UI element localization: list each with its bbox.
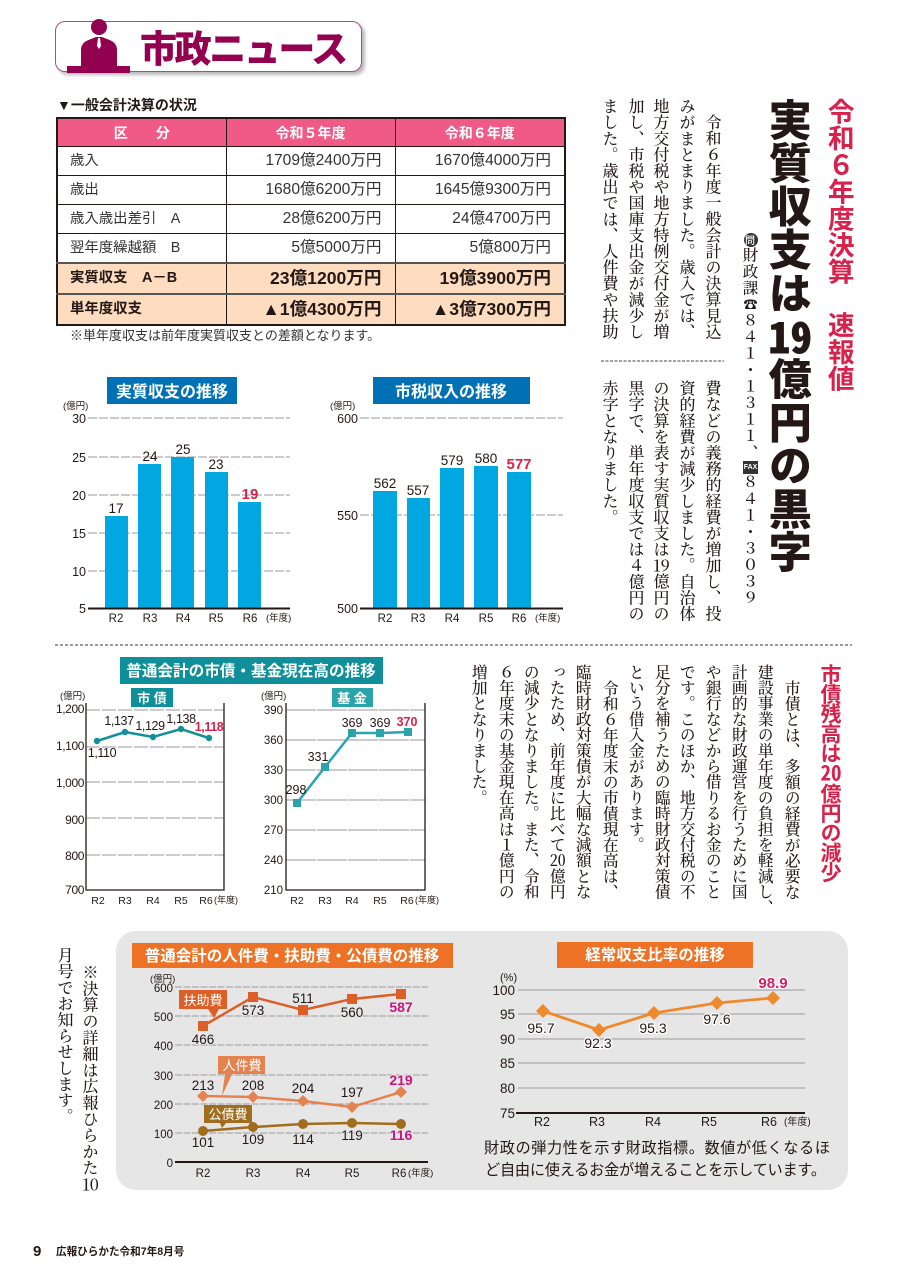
- line chart: 基金: R3: [318, 895, 332, 907]
- settlement table: 23億1200万円: [270, 268, 382, 288]
- settlement table: 1680億6200万円: [265, 181, 382, 198]
- series: 公債費: 116: [390, 1127, 413, 1143]
- chart label: 市 債: [137, 691, 167, 706]
- line chart: 市債: R3: [118, 895, 132, 907]
- line chart: 経常収支比率: 75: [500, 1106, 515, 1121]
- line chart: 人件費・扶助費・公債費: R6: [392, 1168, 406, 1180]
- chart label: [332, 688, 373, 707]
- chart caption: [484, 1140, 830, 1179]
- series: 人件費: 208: [242, 1078, 264, 1093]
- note: details in October issue: [54, 947, 102, 1192]
- article body: municipal debt: ったため、前年度に比べて 20 億円: [547, 664, 569, 900]
- line chart: 基金: (億円): [261, 690, 286, 702]
- line chart: 経常収支比率: R4: [645, 1115, 661, 1129]
- section divider: [55, 644, 852, 646]
- article body: municipal debt: 増加となりました。: [469, 664, 491, 805]
- red heading: municipal debt: 市債残高は 20 億円の減少: [816, 664, 846, 881]
- settlement table: 令和５年度: [276, 124, 346, 140]
- series: 公債費: 114: [292, 1132, 314, 1147]
- settlement table: 28億6200万円: [283, 210, 382, 227]
- line chart: 基金: 390: [264, 705, 283, 717]
- vertical column rule: [601, 360, 724, 362]
- line chart: 市債: 1,000: [56, 776, 85, 790]
- series: 扶助費: 560: [341, 1005, 363, 1020]
- line chart: 基金: 370: [397, 715, 417, 729]
- bar chart: 実質収支の推移: 10: [72, 565, 86, 579]
- series: 人件費: 197: [341, 1085, 363, 1100]
- main headline: 実質収支は 19 億円の黒字: [759, 98, 821, 573]
- bar chart: 実質収支の推移: R6: [243, 613, 257, 625]
- line chart: 基金: R2: [290, 895, 304, 907]
- bar chart: 実質収支の推移: R4: [176, 613, 191, 625]
- article body: municipal debt: です。このほか、地方交付税の不: [677, 664, 699, 900]
- note: details in October issue: ※決算の詳細は広報ひらかた 10: [79, 964, 102, 1192]
- line chart: 市債: R5: [174, 895, 188, 907]
- line chart: 基金: 300: [264, 795, 283, 807]
- column text lower part: 黒字で、単年度収支では４億円の: [625, 380, 648, 622]
- bar chart: 実質収支の推移: 20: [72, 489, 86, 503]
- chart caption: 財政の弾力性を示す財政指標。数値が低くなるほ: [484, 1140, 830, 1157]
- series: 公債費: 119: [341, 1128, 363, 1143]
- bar chart: 市税収入の推移: R2: [378, 613, 392, 625]
- bar chart: 市税収入の推移: 562: [374, 476, 396, 491]
- column text upper part: ました。歳出では、人件費や扶助: [599, 98, 622, 340]
- contact line: 問: [745, 232, 756, 247]
- series: 人件費: 人件費: [222, 1058, 262, 1073]
- bar chart: 実質収支の推移: 5: [79, 602, 86, 616]
- contact line: 財政課 ８４１・１３１１、 ８４１・３０３９: [740, 247, 762, 606]
- line chart: 人件費・扶助費・公債費: 300: [154, 1071, 173, 1083]
- line chart: 経常収支比率: 90: [500, 1032, 515, 1047]
- column text lower part: 赤字となりました。: [599, 380, 622, 525]
- line chart: 経常収支比率: 95: [500, 1007, 515, 1022]
- line chart: 市債: 1,137: [104, 714, 134, 728]
- line chart: 人件費・扶助費・公債費: 100: [154, 1129, 173, 1141]
- settlement table: [56, 117, 566, 326]
- column text upper part: 令和６年度一般会計の決算見込: [702, 114, 725, 339]
- bar chart: 実質収支の推移: 25: [72, 451, 86, 465]
- line chart: 基金: 330: [264, 765, 283, 777]
- chart caption: ど自由に使えるお金が増えることを示しています。: [485, 1162, 826, 1179]
- bar chart: 市税収入の推移: R4: [445, 613, 460, 625]
- line chart: 人件費・扶助費・公債費: 400: [154, 1041, 173, 1053]
- chart title: [373, 377, 530, 404]
- chart title: 普通会計の人件費・扶助費・公債費の推移: [145, 946, 440, 965]
- series: 公債費: 101: [192, 1135, 214, 1150]
- settlement table: 24億4700万円: [452, 210, 551, 227]
- bar chart: 市税収入の推移: 580: [475, 451, 497, 466]
- column text upper part: [599, 98, 725, 340]
- settlement table: 19億3900万円: [440, 268, 551, 288]
- line chart: 人件費・扶助費・公債費: 600: [154, 983, 173, 995]
- bar chart: 市税収入の推移: 500: [337, 602, 358, 616]
- page number: 9: [33, 1243, 41, 1260]
- chart label: 基 金: [337, 691, 367, 706]
- line chart: 市債: 900: [65, 813, 85, 827]
- article body: FY settlement: [599, 98, 725, 622]
- bar chart: 市税収入の推移: R3: [411, 613, 425, 625]
- line chart: 人件費・扶助費・公債費: R3: [246, 1168, 260, 1180]
- line chart: 市債: (年度): [214, 894, 238, 905]
- series: 人件費: [192, 1056, 413, 1113]
- line chart: 経常収支比率: 80: [500, 1081, 515, 1096]
- banner frame: [55, 21, 362, 72]
- series: 扶助費: [179, 989, 413, 1047]
- line chart: 経常収支比率: R5: [701, 1115, 717, 1129]
- series: 人件費: 204: [292, 1081, 315, 1096]
- line chart: 経常収支比率: R6: [761, 1115, 777, 1129]
- line chart: 市債: 1,200: [56, 702, 85, 716]
- column text upper part: 地方交付税や地方特例交付金が増: [650, 98, 673, 340]
- line chart: 経常収支比率: (%): [500, 972, 517, 984]
- table heading: ▼一般会計決算の状況: [57, 97, 197, 113]
- series: 公債費: 公債費: [208, 1107, 248, 1122]
- contact line: ☎: [740, 297, 760, 312]
- line chart: 経常収支比率: 92.3: [584, 1035, 612, 1051]
- column text lower part: 費などの義務的経費が増加し、投: [702, 380, 725, 622]
- chart title: 経常収支比率の推移: [585, 946, 725, 964]
- line chart: 人件費・扶助費・公債費: (億円): [150, 973, 175, 985]
- line chart: 市債: 1,129: [135, 719, 165, 733]
- line chart: 基金: 360: [264, 735, 283, 747]
- red subtitle: 令和６年度決算 速報値: [822, 98, 861, 392]
- settlement table: 5億5000万円: [291, 239, 382, 256]
- chart label: [131, 688, 173, 707]
- settlement table: 実質収支 A－B: [70, 270, 177, 286]
- bar chart: 市税収入の推移: R5: [479, 613, 493, 625]
- settlement table: 1645億9300万円: [435, 181, 551, 198]
- line chart: 経常収支比率: 98.9: [758, 975, 788, 992]
- line chart: 基金: 331: [308, 750, 328, 764]
- bar chart: 市税収入の推移: R6: [512, 613, 526, 625]
- line chart: 市債: [56, 688, 238, 907]
- line chart: 基金: [261, 688, 439, 907]
- line chart: 基金: R4: [345, 895, 359, 907]
- bar chart: 市税収入の推移: (億円): [330, 400, 355, 412]
- bar chart: 市税収入の推移: [330, 377, 563, 625]
- bar chart: 実質収支の推移: R2: [109, 613, 123, 625]
- line chart: 市債: 700: [65, 883, 85, 897]
- series: 公債費: 109: [242, 1132, 264, 1147]
- bar chart: 実質収支の推移: R3: [143, 613, 157, 625]
- bar chart: 実質収支の推移: 23: [208, 457, 224, 472]
- line chart: 経常収支比率: 95.7: [527, 1020, 555, 1036]
- bar chart: 実質収支の推移: 30: [72, 412, 86, 426]
- line chart: 経常収支比率: 85: [500, 1056, 515, 1071]
- line chart: 経常収支比率: 95.3: [639, 1020, 667, 1036]
- article body: municipal debt: や銀行などから借りるお金のこと: [703, 664, 725, 900]
- line chart: 人件費・扶助費・公債費: R2: [196, 1168, 210, 1180]
- article body: municipal debt: の減少となりました。また、令和: [521, 664, 543, 900]
- settlement table: 区 分: [114, 124, 170, 140]
- line chart: 人件費・扶助費・公債費: [132, 943, 453, 1180]
- series: 人件費: 219: [389, 1072, 413, 1088]
- table footnote: ※単年度収支は前年度実質収支との差額となります。: [70, 328, 380, 343]
- bar chart: 市税収入の推移: 550: [337, 509, 358, 523]
- line chart: 経常収支比率: R2: [534, 1115, 550, 1129]
- settlement table: 歳入: [70, 153, 99, 169]
- article body: municipal debt: 計画的な財政運営を行うために国: [729, 664, 751, 900]
- line chart: 基金: R5: [373, 895, 387, 907]
- contact line: FAX: [744, 464, 757, 471]
- column text lower part: [599, 380, 725, 622]
- icon: person at podium: [67, 19, 130, 73]
- line chart: 市債: 1,100: [56, 739, 85, 753]
- line chart: 人件費・扶助費・公債費: 500: [154, 1012, 173, 1024]
- settlement table: 5億800万円: [470, 239, 551, 256]
- bar chart: 市税収入の推移: 579: [441, 453, 463, 468]
- settlement table: 歳出: [70, 182, 99, 198]
- series: 扶助費: 扶助費: [183, 993, 223, 1008]
- bar chart: 実質収支の推移: 25: [175, 442, 191, 457]
- series: 扶助費: 573: [242, 1003, 264, 1018]
- line chart: 基金: 210: [264, 885, 283, 897]
- article body: municipal debt: 足分を補うための臨時財政対策債: [652, 664, 674, 900]
- settlement table: ▲3億7300万円: [432, 299, 551, 319]
- chart title: 市税収入の推移: [395, 382, 507, 401]
- bar chart: 実質収支の推移: 15: [72, 527, 86, 541]
- column text upper part: 加し、市税や国庫支出金が減少し: [625, 98, 648, 340]
- bar chart: 実質収支の推移: (年度): [266, 612, 291, 624]
- chart title: [132, 943, 453, 968]
- chart title: [107, 377, 237, 404]
- line chart: 市債: (億円): [60, 690, 85, 702]
- panel: gray background: [116, 931, 848, 1190]
- article body: municipal debt: 令和６年度末の市債現在高は、: [600, 680, 622, 900]
- line chart: 市債: 800: [65, 849, 85, 863]
- settlement table: ▲1億4300万円: [262, 299, 382, 319]
- chart section title: 市債・基金: 普通会計の市債・基金現在高の推移: [126, 661, 376, 680]
- article body: municipal debt: [469, 664, 804, 915]
- line chart: 市債: 1,118: [195, 720, 224, 734]
- article body: municipal debt: という借入金があります。: [626, 664, 648, 852]
- footer publication name: 広報ひらかた令和7年8月号: [56, 1245, 185, 1258]
- line chart: 基金: 369: [342, 716, 362, 730]
- article body: municipal debt: 市債とは、多額の経費が必要な: [782, 680, 804, 900]
- chart section title: 市債・基金: [120, 657, 383, 684]
- line chart: 市債: 1,110: [88, 746, 117, 760]
- settlement table: 1670億4000万円: [435, 152, 551, 169]
- bar chart: 実質収支の推移: 19: [242, 486, 258, 503]
- series: 扶助費: 466: [192, 1032, 214, 1047]
- line chart: 市債: R4: [146, 895, 160, 907]
- bar chart: 実質収支の推移: 17: [108, 501, 124, 516]
- banner title: 市政ニュース: [140, 19, 346, 73]
- line chart: 経常収支比率: [484, 942, 830, 1179]
- series: 人件費: 213: [192, 1078, 214, 1093]
- series: 公債費: [192, 1105, 413, 1150]
- settlement table: 翌年度繰越額 B: [70, 240, 180, 256]
- bar chart: 市税収入の推移: (年度): [535, 612, 560, 624]
- column text lower part: 資的経費が減少しました。自治体: [676, 380, 699, 622]
- settlement table: 単年度収支: [70, 301, 142, 317]
- article body: municipal debt: 臨時財政対策債が大幅な減額とな: [573, 664, 595, 900]
- line chart: 基金: R6: [400, 895, 414, 907]
- line chart: 基金: (年度): [415, 894, 439, 905]
- line chart: 経常収支比率: 100: [492, 983, 515, 998]
- settlement table: 令和６年度: [445, 124, 515, 140]
- line chart: 人件費・扶助費・公債費: R5: [345, 1168, 359, 1180]
- line chart: 市債: R2: [91, 895, 105, 907]
- line chart: 基金: 270: [264, 825, 283, 837]
- line chart: 人件費・扶助費・公債費: 0: [167, 1158, 173, 1170]
- bar chart: 市税収入の推移: 600: [337, 412, 358, 426]
- line chart: 人件費・扶助費・公債費: 200: [154, 1100, 173, 1112]
- note: details in October issue: 月号でお知らせします。: [54, 947, 77, 1124]
- line chart: 市債: 1,138: [166, 712, 196, 726]
- line chart: 基金: 240: [264, 855, 283, 867]
- article body: municipal debt: ６年度末の基金現在高は１億円の: [496, 664, 518, 900]
- bar chart: 市税収入の推移: 577: [506, 456, 532, 473]
- line chart: 基金: 369: [370, 716, 390, 730]
- series: 扶助費: 587: [389, 999, 413, 1015]
- settlement table: 歳入歳出差引 A: [70, 211, 180, 227]
- header banner: 市政ニュース: [55, 19, 367, 77]
- chart title: 実質収支の推移: [116, 382, 228, 401]
- line chart: 市債: R6: [199, 895, 213, 907]
- column text upper part: みがまとまりました。歳入では、: [676, 98, 699, 340]
- chart title: [557, 942, 753, 968]
- line chart: 基金: 298: [286, 783, 306, 797]
- line chart: 人件費・扶助費・公債費: R4: [296, 1168, 311, 1180]
- line chart: 経常収支比率: 97.6: [703, 1011, 731, 1027]
- column text lower part: の決算を表す実質収支は 19 億円の: [650, 380, 673, 621]
- bar chart: 実質収支の推移: 24: [142, 449, 158, 464]
- line chart: 人件費・扶助費・公債費: (年度): [408, 1167, 433, 1179]
- bar chart: 市税収入の推移: 557: [407, 483, 429, 498]
- bar chart: 実質収支の推移: (億円): [63, 400, 88, 412]
- line chart: 経常収支比率: (年度): [784, 1115, 811, 1128]
- series: 扶助費: 511: [292, 991, 314, 1006]
- bar chart: 実質収支の推移: [63, 377, 291, 625]
- settlement table: 1709億2400万円: [265, 152, 382, 169]
- bar chart: 実質収支の推移: R5: [209, 613, 223, 625]
- article body: municipal debt: 建設事業の単年度の負担を軽減し、: [755, 664, 777, 915]
- line chart: 経常収支比率: R3: [589, 1115, 605, 1129]
